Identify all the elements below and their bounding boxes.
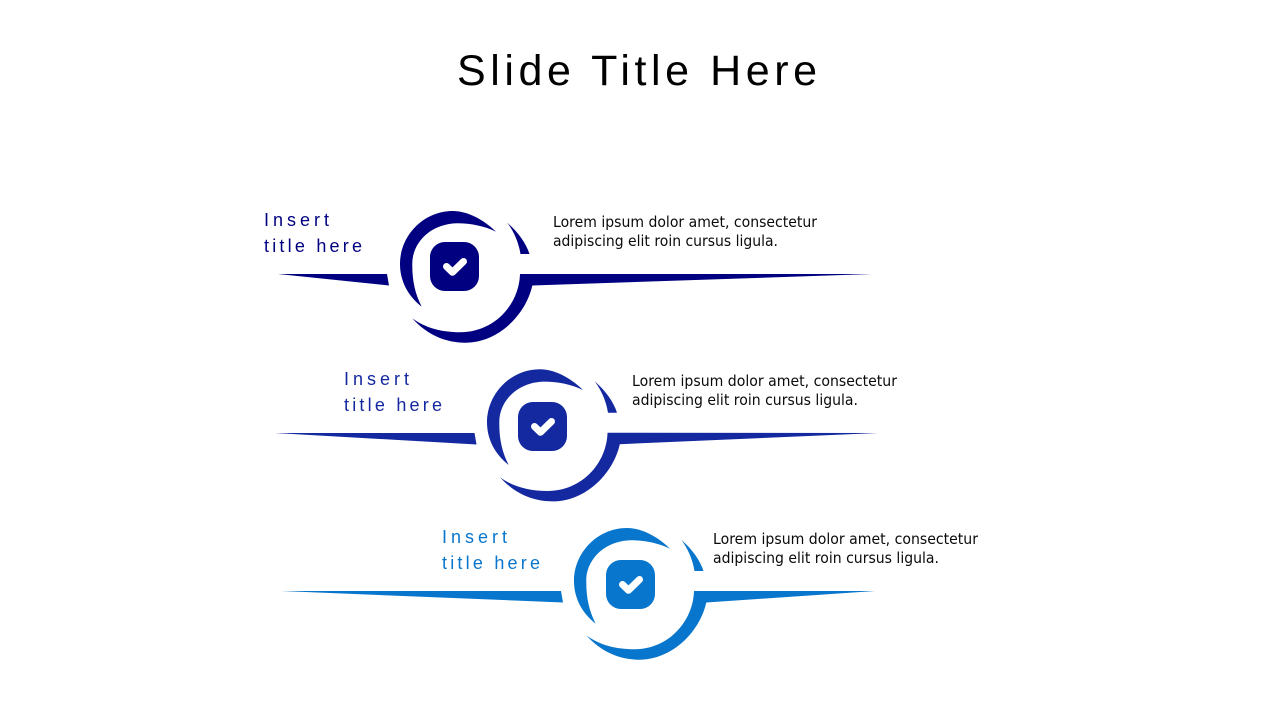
row 3 heading — [442, 527, 540, 573]
title: Slide Title Here — [457, 47, 817, 95]
row 2 description — [632, 372, 898, 409]
row 1: dark navy item — [264, 210, 872, 343]
row 3 heading: Insert — [442, 527, 507, 547]
row 2 description: Lorem ipsum dolor amet, consectetur — [632, 372, 898, 390]
row 3 description: Lorem ipsum dolor amet, consectetur — [713, 530, 979, 548]
row 3 heading: title here — [442, 553, 540, 573]
row 1 check icon — [430, 242, 479, 291]
row 1 description: adipiscing elit roin cursus ligula. — [553, 232, 778, 250]
row 1 ring icon with right tapered line — [400, 211, 872, 343]
row 2 ring icon with right tapered line — [487, 369, 878, 501]
row 3 left tapered line — [281, 591, 563, 602]
row 1 description — [553, 213, 818, 250]
row 2 heading — [344, 369, 442, 415]
row 1 left tapered line — [278, 274, 389, 286]
row 3 ring icon with right tapered line — [574, 528, 875, 660]
row 1 heading: title here — [264, 236, 362, 256]
row 2: royal blue item — [275, 369, 898, 501]
row 2 left tapered line — [275, 433, 476, 444]
row 1 heading: Insert — [264, 210, 329, 230]
row 2 heading: title here — [344, 395, 442, 415]
row 2 check icon — [518, 402, 567, 451]
row 2 heading: Insert — [344, 369, 409, 389]
row 3 description — [713, 530, 979, 567]
row 3 description: adipiscing elit roin cursus ligula. — [713, 549, 939, 567]
row 3 check icon — [606, 560, 655, 609]
row 3: bright blue item — [281, 527, 979, 660]
row 1 description: Lorem ipsum dolor amet, consectetur — [553, 213, 818, 231]
row 2 description: adipiscing elit roin cursus ligula. — [632, 391, 858, 409]
row 1 heading — [264, 210, 362, 256]
